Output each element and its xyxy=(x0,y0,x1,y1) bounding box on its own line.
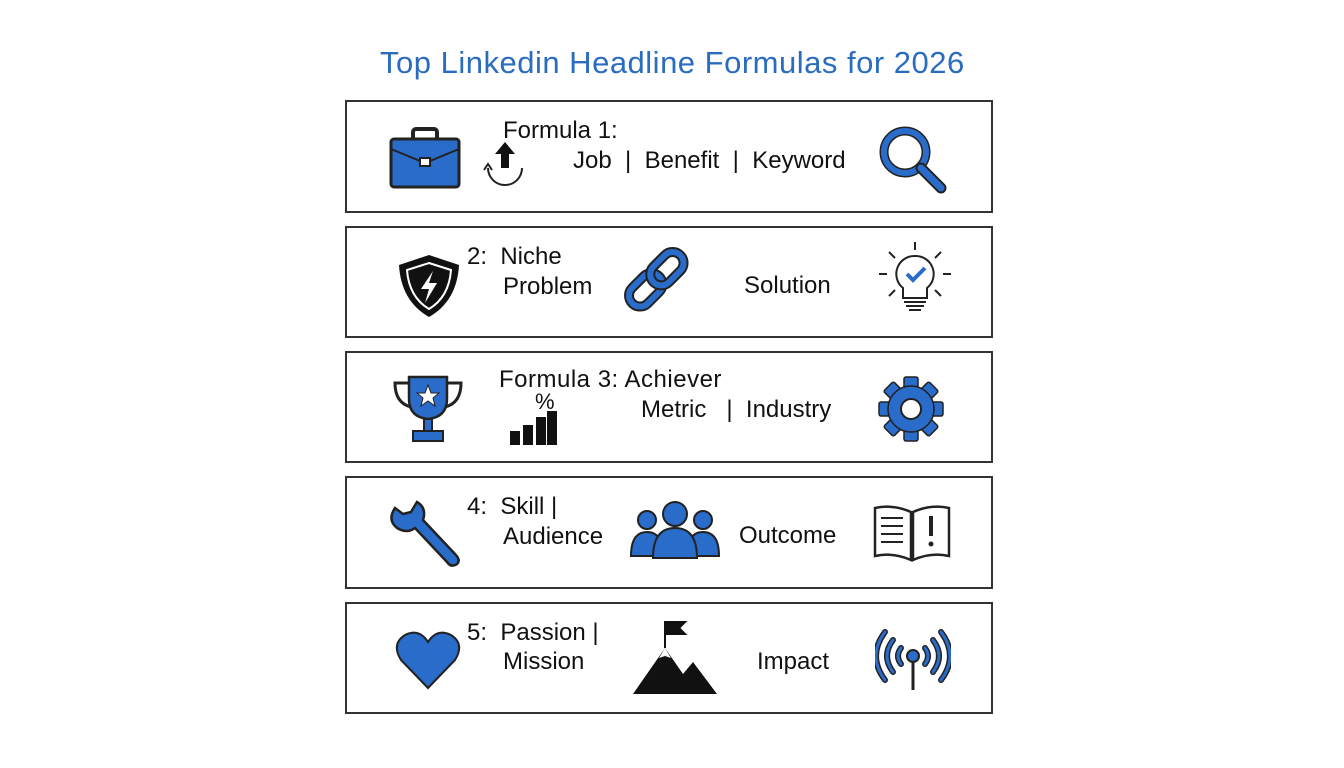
panel: formula 1 xyxy=(345,100,993,213)
panel: formula 3 xyxy=(345,351,993,463)
icon: mountain flag xyxy=(633,621,717,694)
icon: gear xyxy=(878,376,944,442)
icon: shield xyxy=(399,255,459,317)
panel: formula 3: Metric | Industry xyxy=(641,396,831,423)
icon: chain xyxy=(624,247,689,312)
panel: formula 1: Job | Benefit | Keyword xyxy=(573,147,846,174)
text: solution: Solution xyxy=(744,272,831,299)
icon: broadcast xyxy=(875,629,951,690)
icon: magnifier xyxy=(880,126,946,194)
icon: lightbulb xyxy=(879,242,951,311)
icon: group xyxy=(630,501,720,559)
panel: formula 5: Mission xyxy=(503,648,584,675)
icon: briefcase xyxy=(390,127,460,188)
panel: formula 5 xyxy=(345,602,993,714)
text: formula 4: 4: Skill | xyxy=(467,493,557,520)
title: Top Linkedin Headline Formulas for 2026 xyxy=(380,45,965,80)
text: impact: Impact xyxy=(757,648,829,675)
icon: trophy xyxy=(394,376,462,442)
icon: arrow cycle xyxy=(483,142,523,186)
text: formula 2: 2: Niche xyxy=(467,243,562,270)
icon: wrench xyxy=(390,500,460,567)
text: formula 3: Formula 3: Achiever xyxy=(499,366,722,393)
panel: formula 4 xyxy=(345,476,993,589)
icon: heart xyxy=(396,632,460,690)
panel: formula 2: Problem xyxy=(503,273,592,300)
icon: percent bars xyxy=(510,391,557,445)
icon: book xyxy=(874,505,950,562)
text: outcome: Outcome xyxy=(739,522,836,549)
panel: formula 2 xyxy=(345,226,993,338)
text: formula 5: 5: Passion | xyxy=(467,619,599,646)
panel: formula 4: Audience xyxy=(503,523,603,550)
text: formula 1: Formula 1: xyxy=(503,117,618,144)
